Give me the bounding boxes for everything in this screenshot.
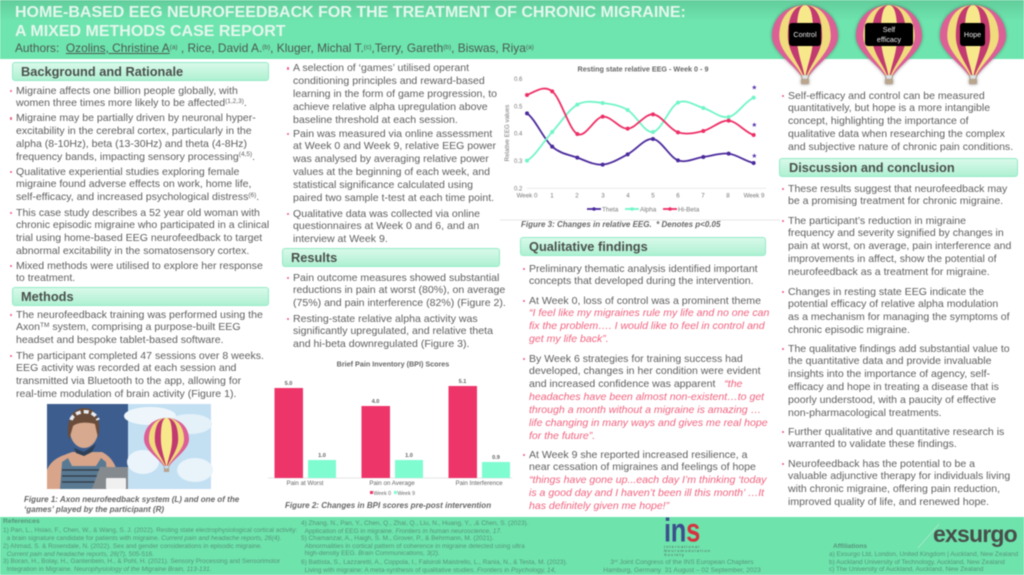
text: resting state changes: potential efficacy of relative alpha modulation: [788, 298, 998, 310]
text: thematic analysis: Preliminary thematic analysis identified important: [529, 263, 758, 275]
balloon: self efficacy: [854, 3, 924, 86]
text: case description: [16, 207, 269, 258]
caption: figure 2: Figure 2: Changes in BPI scores pre-post intervention: [285, 501, 491, 510]
balloon: hope: [938, 3, 1008, 86]
text: mixed methods: [16, 260, 263, 285]
logo: exsurgo: exsurgo: [933, 521, 1017, 547]
line chart: resting state relative EEG: Resting state relative EEG - Week 0 - 9: [578, 64, 708, 74]
text: resting state changes: Changes in resting state EEG indicate the: [788, 286, 984, 298]
text: mixed methods: to treatment.: [16, 272, 75, 284]
conference details: 3rd Joint Congress of the INS European Chapters: [610, 558, 754, 566]
text: self-efficacy and hope: concept, highlighting the importance of: [788, 115, 969, 127]
text: adjunctive therapy: with chronic migraine, offering pain reduction,: [788, 483, 1000, 495]
references: right column: 5) Chamanzar, A., Haigh, S. M., Grover, P., & Behrmann, M. (2021).: [301, 535, 494, 542]
line chart: resting state relative EEG: Hi-Beta: [678, 206, 700, 214]
text: promising treatment: These results suggest that neurofeedback may: [788, 183, 1007, 195]
text: games: achieve relative alpha upregulation above: [293, 101, 488, 113]
text: qualitative value: The qualitative findings add substantial value to: [788, 343, 1010, 355]
text: week 9 quote: [529, 449, 766, 513]
text: pain measurement: values at the beginning of each week, and: [293, 166, 490, 178]
text: qualitative data: Qualitative data was collected via online: [293, 208, 480, 220]
logo: INS: Neuromodulation: [664, 548, 711, 553]
logo: INS: International: [664, 544, 700, 549]
balloon: hope: Hope: [964, 30, 981, 39]
text: further research: [788, 426, 1004, 451]
affiliations: a) Exsurgo Ltd, London, United Kingdom | Auckland, New Zealand: [829, 551, 1018, 558]
line chart: resting state relative EEG: 5: [651, 192, 655, 200]
text: qualitative data: questionnaires at Week 0 and 6, and an: [293, 220, 479, 232]
bar chart: BPI scores: Pain on Average: [369, 480, 415, 487]
text: promising treatment: be a promising treatment for chronic migraine.: [788, 195, 1003, 207]
text: sessions: The participant completed 47 sessions over 8 weeks.: [16, 350, 264, 362]
text: week 6 quote: [529, 353, 768, 442]
line chart: resting state relative EEG: 0.5: [514, 104, 523, 110]
text: games: [293, 62, 497, 127]
heading: discussion and conclusion: Discussion and conclusion: [789, 160, 955, 175]
heading: results: [282, 248, 500, 267]
text: thematic analysis: concepts that developed during the intervention.: [529, 275, 754, 287]
text: week 6 quote: developed, changes in her condition were evident: [529, 365, 761, 377]
text: self-efficacy and hope: qualitative data when researching the complex: [788, 128, 1005, 140]
text: neuronal hyper-excitability: alpha (8-10Hz), beta (13-30Hz) and theta (4-8Hz): [16, 138, 247, 150]
text: pain measurement: statistical significance calculated using: [293, 179, 473, 191]
text: week 9 quote: has definitely given me hope!”: [529, 500, 669, 512]
text: self-efficacy and hope: Self-efficacy and control can be measured: [788, 90, 985, 102]
caption: figure 1: [24, 495, 240, 514]
text: sessions: [16, 350, 264, 401]
references: left column: Integration in Migraine. Neurophysiology of the Migraine Brain, 113-131.: [7, 566, 212, 573]
text: migraine prevalence: [16, 85, 247, 110]
text: week 6 quote: through a month without a migraine is amazing …: [529, 404, 761, 416]
line chart: resting state relative EEG: 7: [701, 192, 705, 200]
bar chart: BPI scores: Week 9: [398, 491, 415, 497]
text: further research: warranted to validate these findings.: [788, 438, 957, 450]
text: week 6 quote: By Week 6 strategies for training success had: [529, 353, 743, 365]
text: qualitative studies: self-efficacy, and increased psychological distress(6).: [16, 191, 259, 203]
panel: methods continued: [286, 62, 498, 245]
panel: background and rationale: [9, 61, 270, 284]
panel: discussion and conclusion: [778, 157, 1019, 508]
logo: INS: Society: [664, 552, 685, 557]
footer band: [0, 517, 1024, 575]
text: sessions: transmitted via Bluetooth to the app, allowing for: [16, 375, 241, 387]
heading: qualitative findings: Qualitative findings: [529, 239, 648, 254]
text: qualitative studies: [16, 166, 259, 204]
line chart: resting state relative EEG: 8: [726, 192, 730, 200]
balloon: self efficacy: efficacy: [877, 34, 901, 44]
text: training system: [16, 309, 263, 347]
line chart: resting state relative EEG: [500, 64, 780, 230]
bar chart: BPI scores: 1.0: [405, 453, 413, 459]
text: week 0 quote: get my life back”.: [529, 333, 609, 345]
text: week 6 quote: headaches have been almost non-existent…to get: [529, 391, 764, 403]
text: case description: trial using home-based EEG neurofeedback to target: [16, 232, 262, 244]
text: neuronal hyper-excitability: excitability in the cerebral cortex, particularly in the: [16, 125, 252, 137]
references: left column: 3) Boran, H., Bolay, H., Gantenbein, H., & Pohl, H. (2021). Sensory Processing and Sensorimotor: [3, 558, 280, 565]
text: week 6 quote: for the future”.: [529, 430, 595, 442]
bar chart: BPI scores: Pain at Worst: [286, 480, 324, 487]
references: right column: 4) Zhang, N., Pan, Y., Chen, Q., Zhai, Q., Liu, N., Huang, Y., ,& Chen, S. (2023).: [301, 520, 528, 527]
references: right column: Living with migraine: A meta-synthesis of qualitative studies. Frontiers in Psychology, 14,: [305, 567, 556, 574]
text: migraine prevalence: women three times more likely to be affected(1,2,3).: [16, 97, 247, 109]
text: neuronal hyper-excitability: frequency bands, impacting sensory processing(4,5).: [16, 151, 255, 163]
bar chart: BPI scores: 1.0: [318, 453, 326, 459]
references: left column: Current pain and headache reports, 26(7), 505-516.: [7, 551, 154, 558]
text: training system: headset and bespoke tablet-based software.: [16, 334, 224, 346]
heading: results: Results: [291, 250, 337, 265]
panel: methods: [9, 286, 270, 514]
text: week 9 quote: At Week 9 she reported increased resilience, a: [529, 449, 747, 461]
line chart: resting state relative EEG: Theta: [602, 206, 619, 214]
logo: INS: [664, 516, 711, 558]
line chart: resting state relative EEG: 0.4: [514, 132, 523, 138]
bar chart: BPI scores: 5.0: [285, 381, 292, 387]
text: pain measurement: Pain was measured via online assessment: [293, 128, 492, 140]
line chart: resting state relative EEG: 0.6: [514, 77, 523, 83]
text: migraine prevalence: Migraine affects one billion people globally, with: [16, 85, 238, 97]
conference details: Hamburg, Germany 31 August – 02 September, 2023: [603, 567, 761, 574]
text: case description: This case study describes a 52 year old woman with: [16, 207, 260, 219]
panel: balloons for control, self-efficacy and hope: [770, 3, 1008, 86]
text: week 0 quote: fix the problem…. I would like to feel in control and: [529, 320, 765, 332]
references: left column: [2, 518, 297, 573]
text: adjunctive therapy: improved quality of life, and renewed hope.: [788, 496, 989, 508]
line chart: resting state relative EEG: 3: [601, 192, 605, 200]
line chart: resting state relative EEG: 0.3: [514, 159, 523, 165]
text: resting state changes: as a mechanism for managing the symptoms of: [788, 311, 1010, 323]
references: left column: a brain signature candidate for patients with migraine. Current pain and headache reports, 26(4).: [7, 535, 281, 542]
text: resting-state activity: Resting-state relative alpha activity was: [293, 313, 478, 325]
line chart: resting state relative EEG: 1: [550, 192, 554, 200]
text: qualitative data: [293, 208, 480, 246]
text: participant reduction: frequency and severity signified by changes in: [788, 227, 1004, 239]
text: pain outcomes: [293, 272, 506, 310]
bar chart: BPI scores: Week 0: [374, 491, 391, 497]
heading: methods: [12, 287, 269, 306]
line chart: resting state relative EEG: 2: [575, 192, 579, 200]
references: right column: 6) Battista, S., Lazzaretti, A., Coppola, I., Falsiroli Maistrello, L., Rania, N., & Testa, M. (2023).: [301, 559, 567, 566]
text: week 9 quote: is a good day and I haven’t been ill this month’ …It: [529, 487, 764, 499]
text: self-efficacy and hope: [788, 90, 1013, 154]
text: participant reduction: The participant’s reduction in migraine: [788, 215, 966, 227]
text: qualitative value: the quantitative data and provide invaluable: [788, 355, 991, 367]
panel: results: [268, 247, 512, 510]
affiliations: [828, 543, 1018, 573]
caption: figure 1: Figure 1: Axon neurofeedback system (L) and one of the: [24, 495, 239, 504]
text: pain measurement: paired two sample t-test at each time point.: [293, 192, 494, 204]
text: adjunctive therapy: [788, 458, 1010, 509]
text: games: learning in the form of game progression, to: [293, 88, 497, 100]
text: games: A selection of ‘games’ utilised operant: [293, 62, 469, 74]
text: week 0 quote: “I feel like my migraines rule my life and no one can: [529, 307, 769, 319]
text: qualitative value: poorly understood, with a paucity of effective: [788, 394, 996, 406]
authors: Authors: Ozolins, Christine A(a) , Rice, David A.(b), Kluger, Michal T.(c),Terry, Gareth(b), Biswas, Riya(a): [15, 41, 534, 55]
balloon: control: [770, 3, 840, 86]
text: sessions: EEG activity was recorded at each session and: [16, 362, 236, 374]
text: pain outcomes: reductions in pain at worst (80%), on average: [293, 284, 505, 296]
references: left column: 2) Ahmad, S. & Rosendale, N. (2022). Sex and gender considerations in episodic migraine.: [3, 543, 262, 550]
affiliations: b) Auckland University of Technology, Auckland, New Zealand: [829, 558, 1005, 566]
text: pain measurement: at Week 0 and Week 9, relative EEG power: [293, 140, 496, 152]
text: week 0 quote: [529, 295, 769, 346]
text: sessions: real-time modulation of brain activity (Figure 1).: [16, 388, 236, 400]
heading: qualitative findings: [520, 237, 766, 256]
text: qualitative data: interview at Week 9.: [293, 233, 388, 245]
text: mixed methods: Mixed methods were utilised to explore her response: [16, 260, 263, 272]
text: week 9 quote: near cessation of migraines and feelings of hope: [529, 461, 756, 473]
heading: background and rationale: [12, 62, 269, 81]
text: adjunctive therapy: Neurofeedback has the potential to be a: [788, 458, 975, 470]
references: right column: Abnormalities in cortical pattern of coherence in migraine detected using ultra: [305, 543, 525, 550]
heading: background and rationale: Background and Rationale: [21, 64, 183, 79]
text: resting state changes: [788, 286, 1010, 337]
text: self-efficacy and hope: quantitatively, but hope is a more intangible: [788, 102, 990, 114]
bar chart: BPI scores: Pain Interference: [455, 480, 503, 487]
references: right column: Application of EEG in migraine. Frontiers in human neuroscience, 17.: [305, 528, 502, 535]
bar chart: BPI scores: 5.1: [459, 379, 466, 385]
references: right column: high-density EEG. Brain Communications, 3(2).: [305, 550, 440, 557]
text: neuronal hyper-excitability: [16, 112, 256, 164]
text: training system: The neurofeedback training was performed using the: [16, 309, 263, 321]
text: week 0 quote: At Week 0, loss of control was a prominent theme: [529, 295, 761, 307]
text: resting-state activity: and hi-beta downregulated (Figure 3).: [293, 338, 469, 350]
text: resting-state activity: [293, 313, 493, 351]
text: qualitative value: [788, 343, 1010, 420]
text: neuronal hyper-excitability: Migraine may be partially driven by neuronal hyper-: [16, 112, 256, 124]
conference details: [603, 558, 761, 574]
line chart: resting state relative EEG: Alpha: [640, 206, 657, 214]
text: further research: Further qualitative and quantitative research is: [788, 426, 1004, 438]
line chart: resting state relative EEG: 0.2: [514, 186, 523, 192]
text: week 6 quote: and increased confidence was apparent “the: [529, 378, 742, 390]
line chart: resting state relative EEG: 6: [676, 192, 680, 200]
text: training system: AxonTM system, comprising a purpose-built EEG: [16, 321, 241, 333]
text: pain measurement: [293, 128, 496, 205]
text: week 9 quote: “things have gone up...each day I’m thinking ‘today: [529, 474, 766, 486]
line chart: resting state relative EEG: Relative EEG values: [504, 105, 511, 161]
text: adjunctive therapy: valuable adjunctive therapy for individuals living: [788, 470, 1010, 482]
text: qualitative value: efficacy and hope in treating a disease that is: [788, 381, 999, 393]
bar chart: BPI scores: 4.0: [372, 399, 379, 405]
bar chart: BPI scores: Brief Pain Inventory (BPI) Scores: [337, 360, 449, 368]
references: left column: 1) Pan, L., Hsiao, F., Chen, W., & Wang, S. J. (2022). Resting state electrophysiological cortical activity:: [3, 527, 297, 534]
caption: figure 1: ‘games’ played by the participant (R): [24, 505, 164, 514]
text: games: baseline threshold at each session.: [293, 114, 458, 126]
balloon: self efficacy: Self: [883, 25, 895, 34]
heading: methods: Methods: [21, 289, 74, 304]
heading: discussion and conclusion: [779, 158, 1018, 177]
title: A MIXED METHODS CASE REPORT: [15, 23, 286, 40]
bar chart: BPI scores: [268, 360, 512, 497]
text: participant reduction: neurofeedback as a treatment for migraine.: [788, 266, 990, 278]
text: participant reduction: [788, 215, 1011, 279]
text: qualitative value: insights into the importance of agency, self-: [788, 368, 990, 380]
text: qualitative studies: migraine found adverse effects on work, home life,: [16, 178, 251, 190]
panel: qualitative findings: [519, 236, 770, 512]
text: promising treatment: [788, 183, 1007, 208]
text: participant reduction: pain at worst, on average, pain interference and: [788, 240, 1011, 252]
text: week 6 quote: life changing in many ways and gives me real hope: [529, 417, 768, 429]
affiliations: Affiliations: [833, 543, 867, 550]
line chart: resting state relative EEG: Week 9: [744, 192, 765, 200]
text: qualitative value: non-pharmacological treatments.: [788, 407, 942, 419]
text: thematic analysis: [529, 263, 758, 288]
text: pain measurement: was analysed by averaging relative power: [293, 153, 489, 165]
title: [15, 4, 686, 40]
references: left column: References: [3, 518, 40, 525]
affiliations: c) The University of Auckland, Auckland, New Zealand: [829, 566, 983, 573]
line chart: resting state relative EEG: 4: [626, 192, 630, 200]
references: right column: [300, 520, 567, 574]
text: qualitative studies: Qualitative experiential studies exploring female: [16, 166, 239, 178]
text: games: conditioning principles and reward-based: [293, 75, 485, 87]
text: pain outcomes: (75%) and pain interference (82%) (Figure 2).: [293, 297, 506, 309]
figure 1: headset photo and balloon game: [46, 403, 213, 490]
text: case description: chronic episodic migraine who participated in a clinical: [16, 219, 269, 231]
bar chart: BPI scores: 0.9: [492, 455, 500, 461]
text: pain outcomes: Pain outcome measures showed substantial: [293, 272, 499, 284]
caption: figure 3: Figure 3: Changes in relative EEG. * Denotes p<0.05: [521, 220, 720, 229]
balloon: control: Control: [793, 30, 817, 39]
header banner: [0, 0, 1024, 59]
text: case description: abnormal excitability in the somatosensory cortex.: [16, 245, 249, 257]
title: HOME-BASED EEG NEUROFEEDBACK FOR THE TREATMENT OF CHRONIC MIGRAINE:: [15, 4, 686, 21]
text: resting state changes: chronic episodic migraine.: [788, 324, 910, 336]
line chart: resting state relative EEG: Week 0: [517, 192, 538, 200]
text: participant reduction: improvements in affect, show the potential of: [788, 253, 997, 265]
text: resting-state activity: significantly upregulated, and relative theta: [293, 325, 493, 337]
text: self-efficacy and hope: and subjective nature of chronic pain conditions.: [788, 141, 1013, 153]
